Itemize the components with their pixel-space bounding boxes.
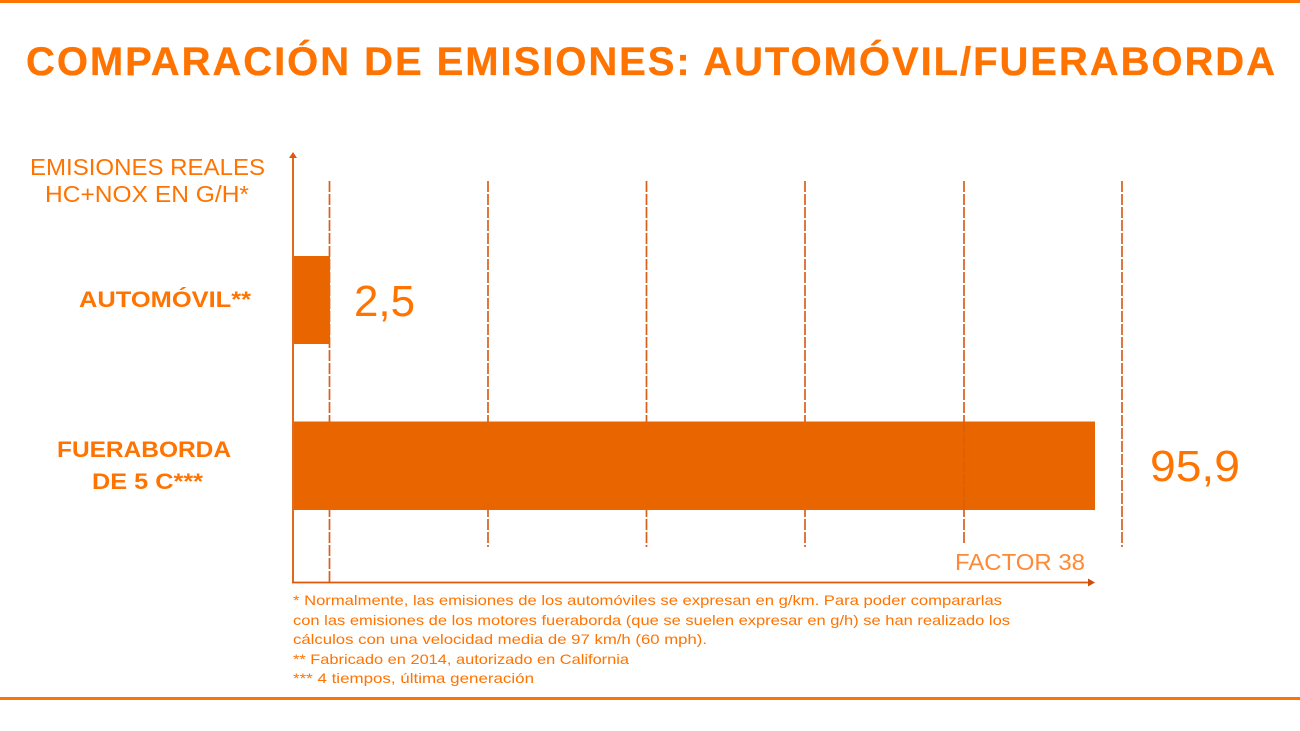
value: automóvil: 2,5 xyxy=(354,277,415,326)
y-axis title: HC+NOX EN G/H* xyxy=(45,181,249,207)
bar: automóvil xyxy=(293,256,330,344)
label: fueraborda xyxy=(57,437,231,494)
factor label: FACTOR 38 xyxy=(955,549,1085,575)
footnotes: con las emisiones de los motores fueraborda (que se suelen expresar en g/h) se han realizado los xyxy=(293,612,1010,628)
y-axis title xyxy=(30,154,265,207)
label: automóvil: AUTOMÓVIL** xyxy=(79,287,252,312)
title: COMPARACIÓN DE EMISIONES: AUTOMÓVIL/FUERABORDA xyxy=(26,38,1275,84)
value: fueraborda: 95,9 xyxy=(1150,442,1240,491)
dashed grid lines xyxy=(330,181,1122,582)
bar: fueraborda xyxy=(293,422,1095,510)
label: fueraborda: FUERABORDA xyxy=(57,437,231,462)
footnotes: cálculos con una velocidad media de 97 km/h (60 mph). xyxy=(293,631,707,647)
footnotes: *** 4 tiempos, última generación xyxy=(293,670,534,686)
footnotes: * Normalmente, las emisiones de los automóviles se expresan en g/km. Para poder compararlas xyxy=(293,592,1002,608)
label: fueraborda: DE 5 C*** xyxy=(92,469,204,494)
chart axes xyxy=(289,152,1095,586)
y-axis title: EMISIONES REALES xyxy=(30,154,265,180)
footnotes xyxy=(293,592,1010,686)
footnotes: ** Fabricado en 2014, autorizado en California xyxy=(293,651,629,667)
grid line over bar xyxy=(963,422,965,510)
